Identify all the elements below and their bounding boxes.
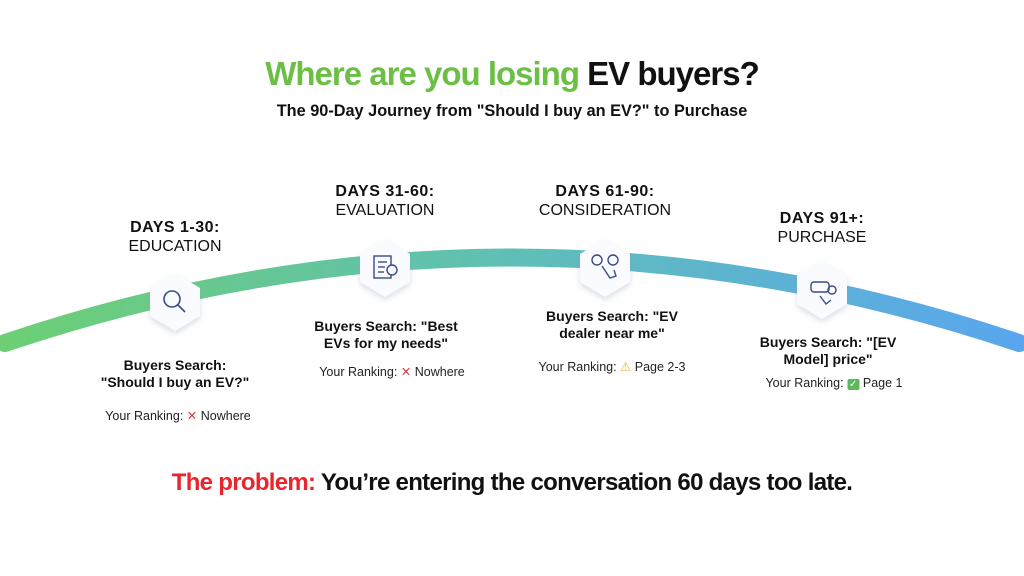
stage 4 search: Model] price" [783, 351, 873, 367]
stage 2 header: DAYS 31-60: [335, 183, 435, 200]
stage 4 header: DAYS 91+: [780, 210, 864, 227]
stage 2 search [314, 318, 458, 351]
stage 2 header: EVALUATION [336, 202, 434, 219]
stage 1 header: DAYS 1-30: [130, 219, 220, 236]
stage 4 ranking: Your Ranking: ✓ Page 1 [765, 376, 903, 390]
stage 2 search: Buyers Search: "Best [314, 318, 458, 334]
stage 3 ranking: Your Ranking: ⚠ Page 2-3 [539, 360, 685, 374]
stage 3 header: CONSIDERATION [539, 202, 671, 219]
stage 1 search: "Should I buy an EV?" [101, 374, 249, 390]
stage 2 ranking: Your Ranking: ✕ Nowhere [319, 365, 465, 379]
stage 4 search: Buyers Search: "[EV [760, 334, 896, 350]
stage 3 header: DAYS 61-90: [555, 183, 655, 200]
stage 1 search: Buyers Search: [124, 357, 226, 373]
icon: car purchase hexagon [797, 261, 847, 319]
bottom problem statement: The problem: You’re entering the conversation 60 days too late. [172, 469, 852, 496]
stage 3 search: dealer near me" [559, 325, 665, 341]
icon: checklist hexagon [360, 239, 410, 297]
stage 3 search: Buyers Search: "EV [546, 308, 678, 324]
stage 1 search [101, 357, 249, 390]
stage 3 header [539, 183, 671, 219]
stage 1 ranking: Your Ranking: ✕ Nowhere [105, 409, 251, 423]
stage 4 header [778, 210, 866, 246]
subtitle: The 90-Day Journey from "Should I buy an EV?" to Purchase [277, 102, 747, 120]
stage 1 header: EDUCATION [128, 238, 222, 255]
title: Where are you losing EV buyers? [265, 55, 759, 92]
stage 2 header [335, 183, 435, 219]
stage 4 search [760, 334, 896, 367]
stage 2 search: EVs for my needs" [324, 335, 448, 351]
stage 4 header: PURCHASE [778, 229, 866, 246]
icon: search hexagon [150, 273, 200, 331]
stage 3 search [546, 308, 678, 341]
stage 1 header [128, 219, 222, 255]
icon: hand choice hexagon [580, 239, 630, 297]
